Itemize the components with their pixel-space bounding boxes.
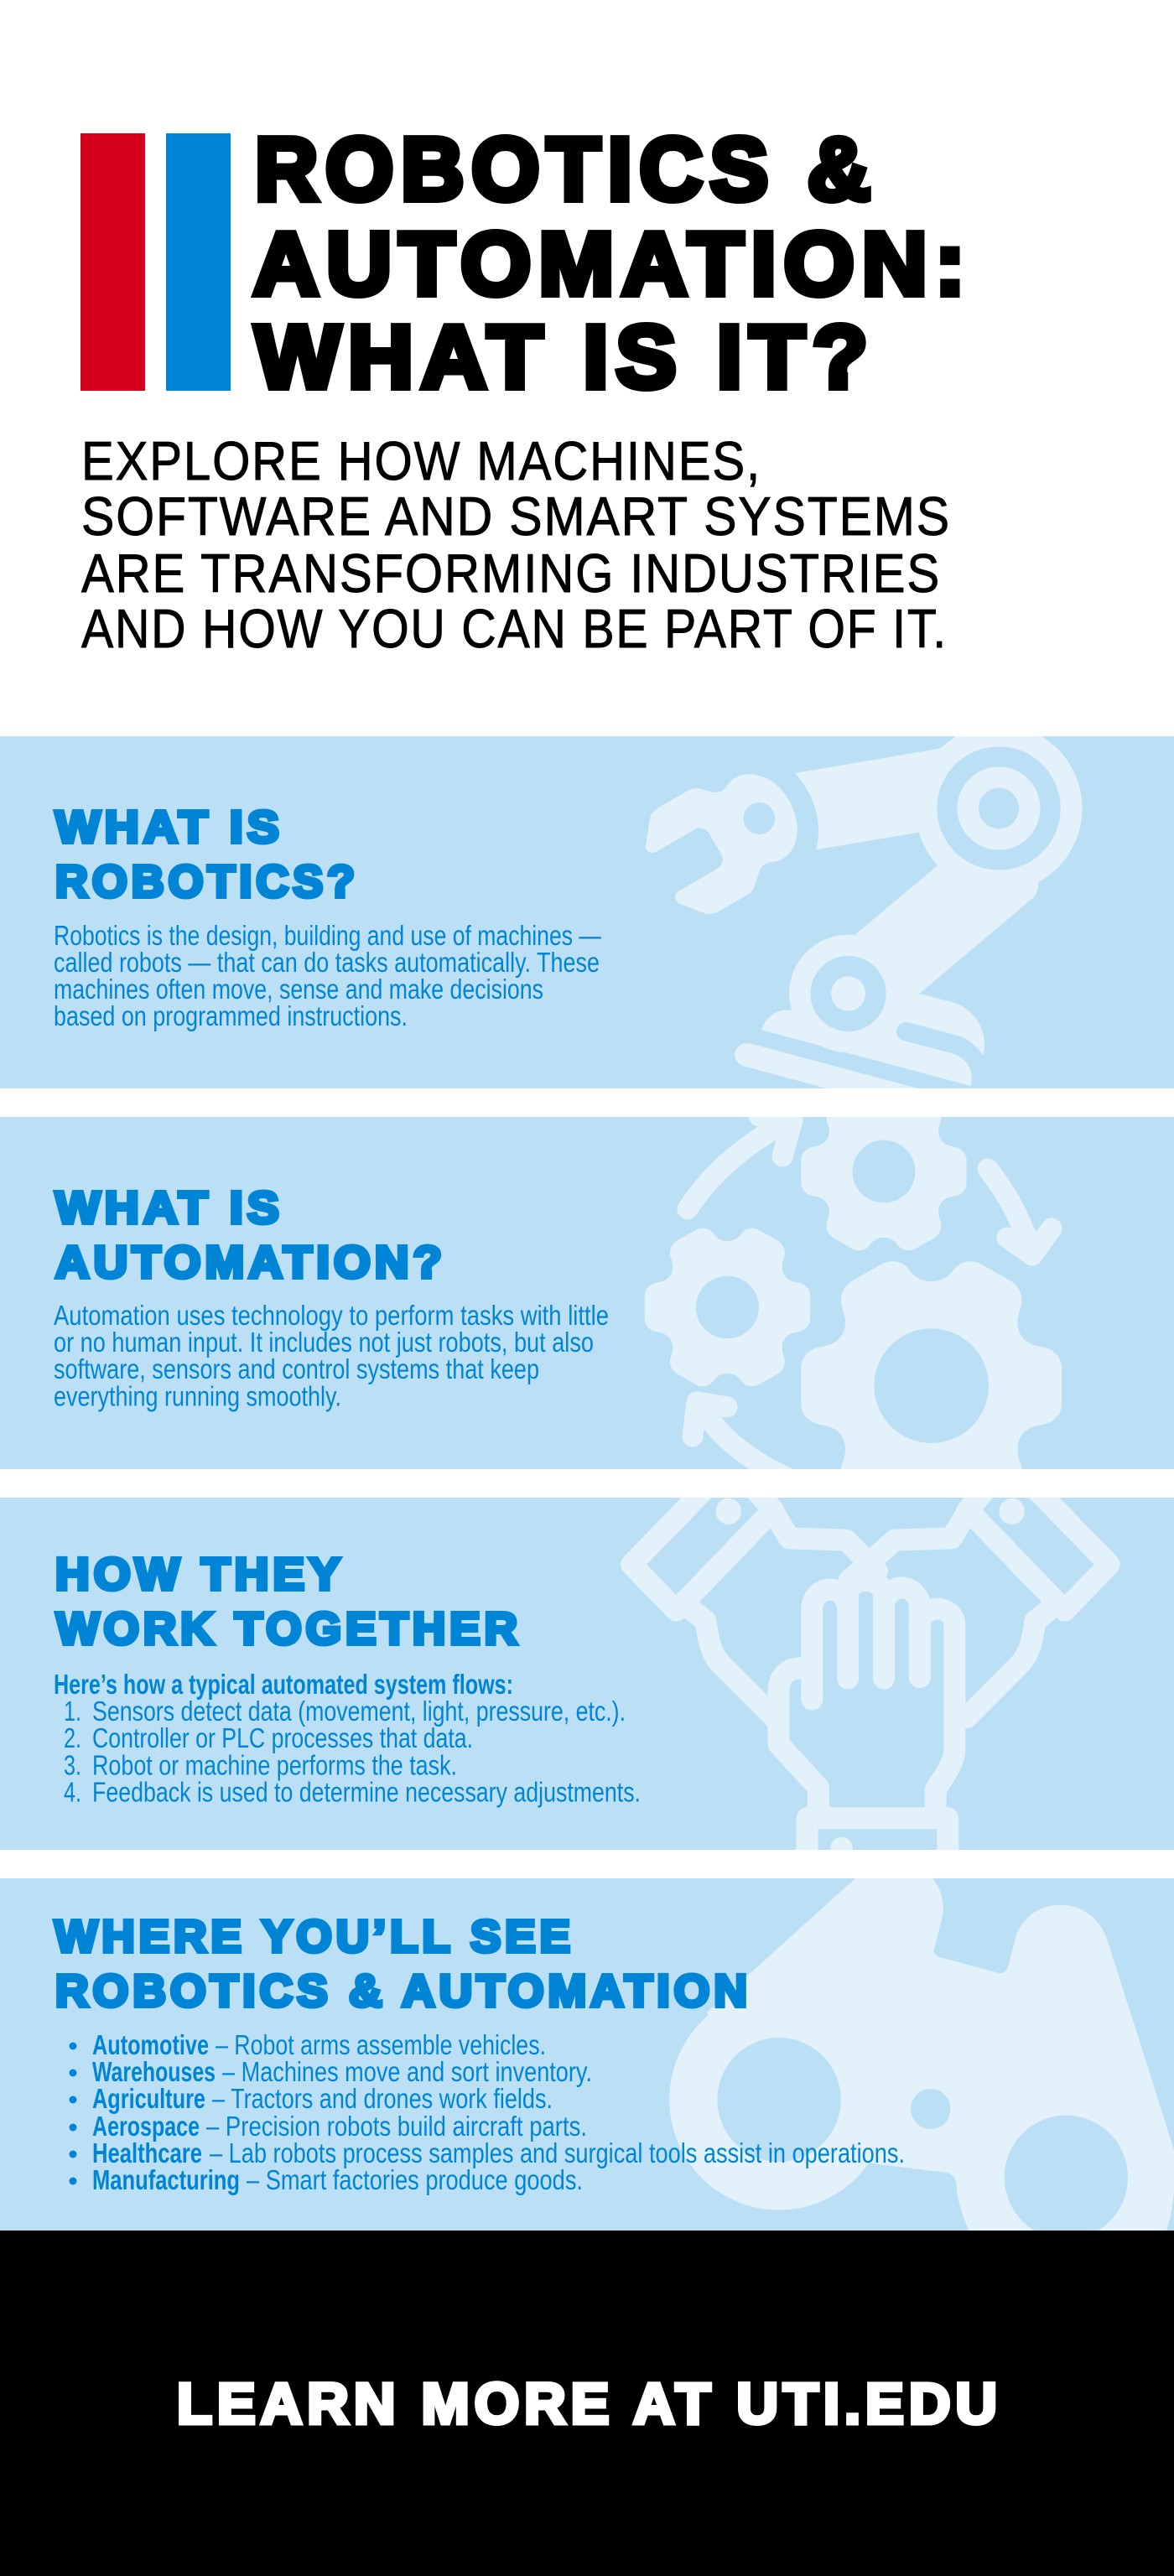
subtitle	[81, 430, 951, 659]
bullet list: – Precision robots build aircraft parts.	[206, 2111, 587, 2142]
bullet list: Agriculture	[92, 2083, 205, 2114]
call to action: LEARN MORE AT UTI.EDU	[177, 2371, 1002, 2436]
logo: red bar	[81, 133, 145, 391]
numbered list: Sensors detect data (movement, light, pressure, etc.).	[92, 1696, 626, 1727]
header	[81, 120, 973, 659]
bullet list: Healthcare	[92, 2137, 202, 2168]
heading: WHERE YOU’LL SEE	[55, 1912, 574, 1962]
numbered list: 1.	[64, 1696, 81, 1727]
title: AUTOMATION:	[253, 215, 973, 314]
title: ROBOTICS &	[255, 120, 878, 219]
icon: hand with robot arms	[631, 1462, 1109, 1859]
panel: how they work together	[0, 1498, 1174, 1850]
heading: WHAT IS	[55, 1182, 283, 1233]
heading	[55, 1912, 751, 2016]
numbered list: Robot or machine performs the task.	[92, 1749, 457, 1781]
body text: Robotics is the design, building and use of machines —	[54, 920, 601, 951]
panel: what is automation	[0, 1117, 1174, 1469]
body text: or no human input. It includes not just robots, but also	[54, 1327, 594, 1358]
icon: robot arm	[646, 724, 1083, 1089]
bullet list: – Machines move and sort inventory.	[222, 2056, 592, 2087]
title: WHAT IS IT?	[255, 308, 875, 407]
subtitle: EXPLORE HOW MACHINES,	[81, 430, 761, 491]
intro line: Here’s how a typical automated system flows:	[54, 1669, 513, 1700]
heading: ROBOTICS?	[55, 857, 359, 907]
logo: blue bar	[166, 133, 231, 391]
bullet list: – Tractors and drones work fields.	[212, 2083, 553, 2114]
heading: WORK TOGETHER	[56, 1603, 522, 1654]
bullet list	[69, 2029, 905, 2195]
heading: AUTOMATION?	[55, 1238, 446, 1288]
numbered list: 4.	[64, 1776, 81, 1808]
numbered list: 2.	[64, 1722, 81, 1753]
subtitle: SOFTWARE AND SMART SYSTEMS	[81, 486, 951, 547]
body text	[54, 1300, 609, 1412]
bullet list: – Lab robots process samples and surgical tools assist in operations.	[210, 2137, 905, 2168]
title	[253, 120, 973, 407]
bullet list: Warehouses	[92, 2056, 216, 2087]
body text: based on programmed instructions.	[54, 1000, 408, 1031]
numbered list: Feedback is used to determine necessary adjustments.	[92, 1776, 641, 1808]
bullet list: Aerospace	[92, 2111, 200, 2142]
numbered list: Controller or PLC processes that data.	[92, 1722, 473, 1753]
heading	[55, 1182, 446, 1288]
icon: gears and arrows	[645, 1093, 1062, 1510]
subtitle: ARE TRANSFORMING INDUSTRIES	[81, 543, 941, 604]
heading: WHAT IS	[55, 802, 283, 852]
bullet list: Automotive	[92, 2029, 209, 2060]
icon: robot arm close-up	[669, 1876, 1174, 2240]
body text: called robots — that can do tasks automatically. These	[54, 947, 600, 978]
body text: Automation uses technology to perform tasks with little	[54, 1300, 609, 1331]
numbered list	[64, 1696, 641, 1808]
body text: software, sensors and control systems that keep	[54, 1353, 539, 1384]
heading	[55, 1550, 522, 1654]
panel: where you'll see robotics and automation	[0, 1878, 1174, 2231]
heading	[55, 802, 359, 907]
body text	[54, 920, 601, 1031]
heading: HOW THEY	[55, 1550, 345, 1600]
subtitle: AND HOW YOU CAN BE PART OF IT.	[81, 598, 948, 659]
body text: machines often move, sense and make decisions	[54, 974, 543, 1005]
panel: what is robotics	[0, 736, 1174, 1088]
bullet list: Manufacturing	[92, 2164, 240, 2195]
heading: ROBOTICS & AUTOMATION	[55, 1966, 751, 2016]
bullet list: – Smart factories produce goods.	[247, 2164, 583, 2195]
bullet list: – Robot arms assemble vehicles.	[216, 2029, 546, 2060]
footer band	[0, 2231, 1174, 2576]
numbered list: 3.	[64, 1749, 81, 1781]
body text: everything running smoothly.	[54, 1380, 341, 1412]
